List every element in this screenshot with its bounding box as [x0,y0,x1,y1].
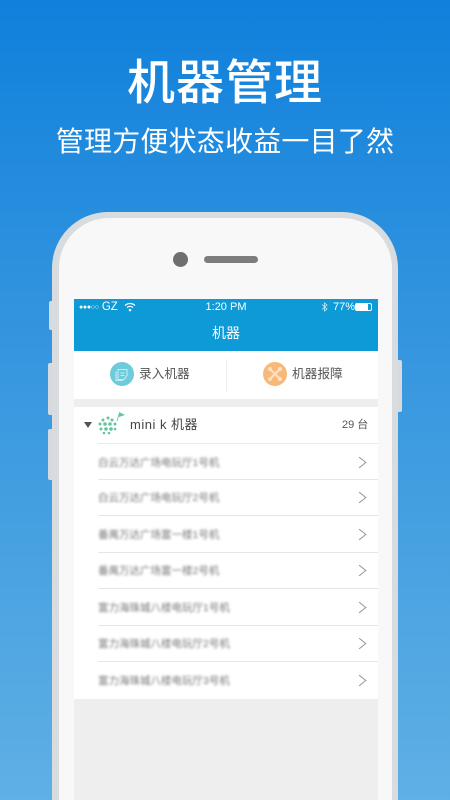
label add: 录入机器 [139,367,190,381]
row 7 [98,674,366,687]
row 6: 富力海珠城八楼电玩厅2号机 [98,638,230,650]
machine list [74,407,378,699]
row 6 [98,625,378,662]
side buttons [48,301,52,480]
list rows [98,443,378,687]
row 1 [98,443,378,480]
subtitle: 管理方便状态收益一目了然 [56,126,394,157]
camera [173,252,188,267]
row 5: 富力海珠城八楼电玩厅1号机 [98,602,230,614]
label fault: 机器报障 [292,367,343,381]
row 3 [98,516,378,553]
app screen [74,299,378,800]
status carrier: ●●●○○ GZ [79,301,118,313]
row 2 [98,479,378,516]
nav title: 机器 [212,325,240,341]
group header [84,412,368,434]
action: report fault [263,362,343,386]
group name: mini k 机器 [130,417,198,432]
title: 机器管理 [127,57,323,110]
count: 29 台 [342,419,368,431]
icon: fault [263,362,287,386]
status bar and navigation [74,299,378,351]
row 4: 番禺万达广场富一楼2号机 [98,565,219,577]
icon: add [110,362,134,386]
row 5 [98,589,378,626]
icon: triangle [84,422,92,428]
phone mockup [48,212,402,800]
status battery: 77% [333,301,355,313]
status battery [333,301,372,313]
phone body [52,212,398,800]
icon: wifi [124,302,136,312]
row 2: 白云万达广场电玩厅2号机 [98,492,219,504]
action: add machine [110,362,190,386]
action bar [74,351,378,399]
speaker [204,256,258,263]
status time: 1:20 PM [206,301,246,313]
icon: mini k logo [98,412,125,434]
row 3: 番禺万达广场富一楼1号机 [98,529,219,541]
icon: bluetooth [322,302,328,312]
row 7: 富力海珠城八楼电玩厅3号机 [98,675,230,687]
row 4 [98,552,378,589]
row 1: 白云万达广场电玩厅1号机 [98,457,219,469]
